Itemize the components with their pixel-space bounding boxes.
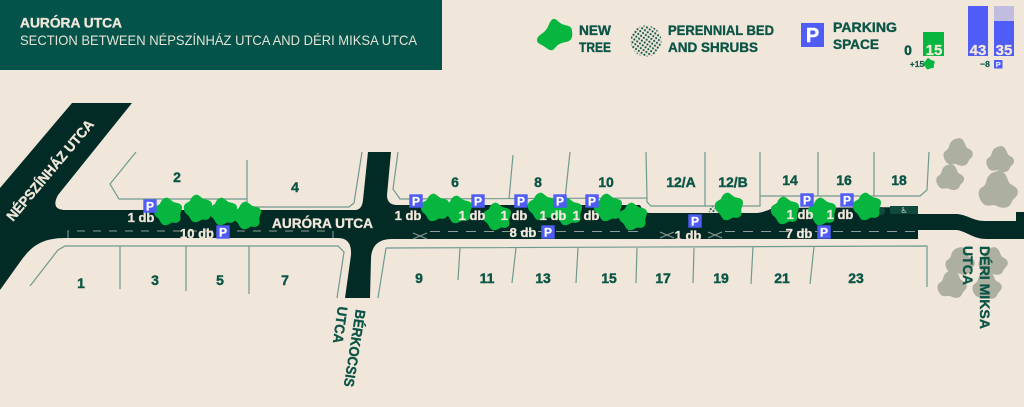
label: Népszínház utca: NÉPSZÍNHÁZ UTCA	[3, 116, 97, 224]
parking count labels: 1 db	[395, 208, 421, 223]
parking count labels	[128, 207, 853, 243]
parking count labels: 1 db	[827, 207, 853, 222]
chart: parking before and after	[968, 6, 1014, 69]
accessible parking bay	[890, 206, 918, 215]
label: Auróra utca: AURÓRA UTCA	[272, 214, 373, 231]
label: Déri Miksa utca: DÉRI MIKSA	[977, 246, 993, 329]
chart: trees before and after: 15	[926, 42, 942, 59]
shrub patches	[708, 206, 885, 215]
label: Bérkocsis utca: BÉRKOCSIS	[341, 309, 369, 388]
legend label: perennial bed and shrubs: PERENNIAL BED	[668, 22, 774, 38]
parking count labels: 1 db	[675, 228, 701, 243]
lot numbers: 21	[774, 270, 790, 286]
title: AURÓRA UTCA	[20, 16, 122, 30]
legend label: parking space: SPACE	[833, 36, 879, 52]
road network	[0, 103, 1024, 298]
lot numbers: 17	[655, 270, 671, 286]
chart: trees before and after: +15	[910, 59, 924, 69]
label: Bérkocsis utca: UTCA	[330, 306, 351, 344]
chart: parking before and after: 43	[970, 42, 986, 59]
icon: perennial bed and shrubs	[630, 26, 662, 56]
lot numbers: 8	[534, 174, 542, 190]
subtitle: SECTION BETWEEN NÉPSZÍNHÁZ UTCA AND DÉRI MIKSA UTCA	[20, 32, 418, 48]
grey existing trees	[938, 140, 1016, 297]
chart: parking before and after: 35	[996, 42, 1012, 59]
legend label: parking space: PARKING	[833, 19, 897, 35]
chart: parking before and after: P	[996, 60, 1001, 69]
lot numbers: 14	[782, 172, 798, 188]
lot numbers: 9	[415, 270, 423, 286]
chart: trees before and after	[904, 32, 944, 69]
lot numbers	[77, 169, 907, 291]
lot numbers: 15	[601, 270, 617, 286]
icon: parking space	[801, 23, 824, 47]
legend	[537, 19, 897, 57]
parking count labels: 1 db	[128, 210, 154, 225]
legend label: new tree: TREE	[579, 39, 611, 55]
parking lane markings	[68, 231, 918, 239]
lot numbers: 12/B	[718, 174, 748, 190]
parking count labels: 1 db	[459, 208, 485, 223]
lot numbers: 10	[598, 174, 614, 190]
header panel	[0, 0, 442, 70]
lot numbers: 4	[291, 179, 299, 195]
parking count labels: 1 db	[573, 208, 599, 223]
lot numbers: 3	[151, 272, 159, 288]
parking count labels: 1 db	[540, 208, 566, 223]
lot numbers: 19	[713, 270, 729, 286]
lot numbers: 6	[451, 174, 459, 190]
legend label: perennial bed and shrubs: AND SHRUBS	[668, 39, 758, 55]
icon: new tree	[537, 19, 572, 50]
legend label: new tree: NEW	[579, 22, 612, 38]
lot numbers: 7	[281, 272, 289, 288]
parking count labels: 1 db	[501, 208, 527, 223]
lot numbers: 2	[173, 169, 181, 185]
lot numbers: 5	[216, 272, 224, 288]
lot numbers: 12/A	[666, 174, 696, 190]
parking count labels: 7 db	[786, 226, 812, 241]
label: Bérkocsis utca	[330, 306, 369, 388]
label: Déri Miksa utca: UTCA	[960, 246, 976, 285]
icon: parking space: P	[806, 25, 819, 47]
lot numbers: 16	[836, 172, 852, 188]
lot numbers: 1	[77, 275, 85, 291]
lot numbers: 13	[535, 270, 551, 286]
accessible parking bay: ♿	[900, 206, 908, 215]
lot numbers: 23	[848, 270, 864, 286]
parking markers	[143, 193, 854, 239]
label: Déri Miksa utca	[960, 246, 993, 329]
lot numbers: 11	[480, 270, 495, 286]
lot numbers: 18	[891, 172, 907, 188]
parking count labels: 8 db	[510, 225, 536, 240]
lot boundaries	[30, 152, 929, 298]
parking count labels: 1 db	[787, 207, 813, 222]
chart: trees before and after: 0	[904, 42, 912, 58]
new trees	[155, 194, 880, 229]
parking count labels: 10 db	[180, 226, 214, 241]
street labels	[3, 116, 373, 388]
chart: parking before and after: −8	[980, 59, 990, 69]
